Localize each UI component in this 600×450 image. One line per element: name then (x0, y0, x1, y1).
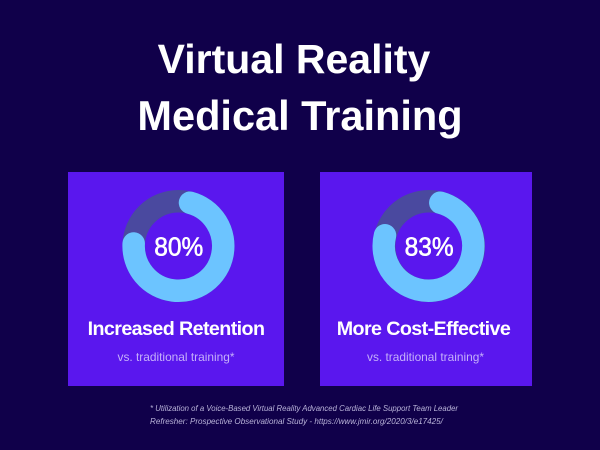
donut chart: 83%: 83% (405, 232, 454, 262)
panel: increased retention (68, 172, 284, 386)
footnote: * Utilization of a Voice-Based Virtual Reality Advanced Cardiac Life Support Team Leader (150, 404, 458, 413)
footnote: Refresher: Prospective Observational Study - https://www.jmir.org/2020/3/e17425/ (150, 416, 443, 426)
footnote (150, 404, 458, 426)
donut chart: 80%: 80% (154, 232, 203, 262)
text: comparison note: vs. traditional training* (367, 350, 484, 364)
title: Virtual Reality (158, 36, 430, 82)
text: comparison note: vs. traditional training* (118, 350, 234, 364)
heading: more cost-effective: More Cost-Effective (337, 318, 510, 340)
title: Medical Training (137, 92, 463, 139)
title (137, 36, 463, 139)
panel: more cost-effective (320, 172, 532, 386)
donut chart: 83% (372, 190, 485, 302)
heading: increased retention: Increased Retention (88, 318, 264, 340)
donut chart: 80% (122, 190, 234, 302)
